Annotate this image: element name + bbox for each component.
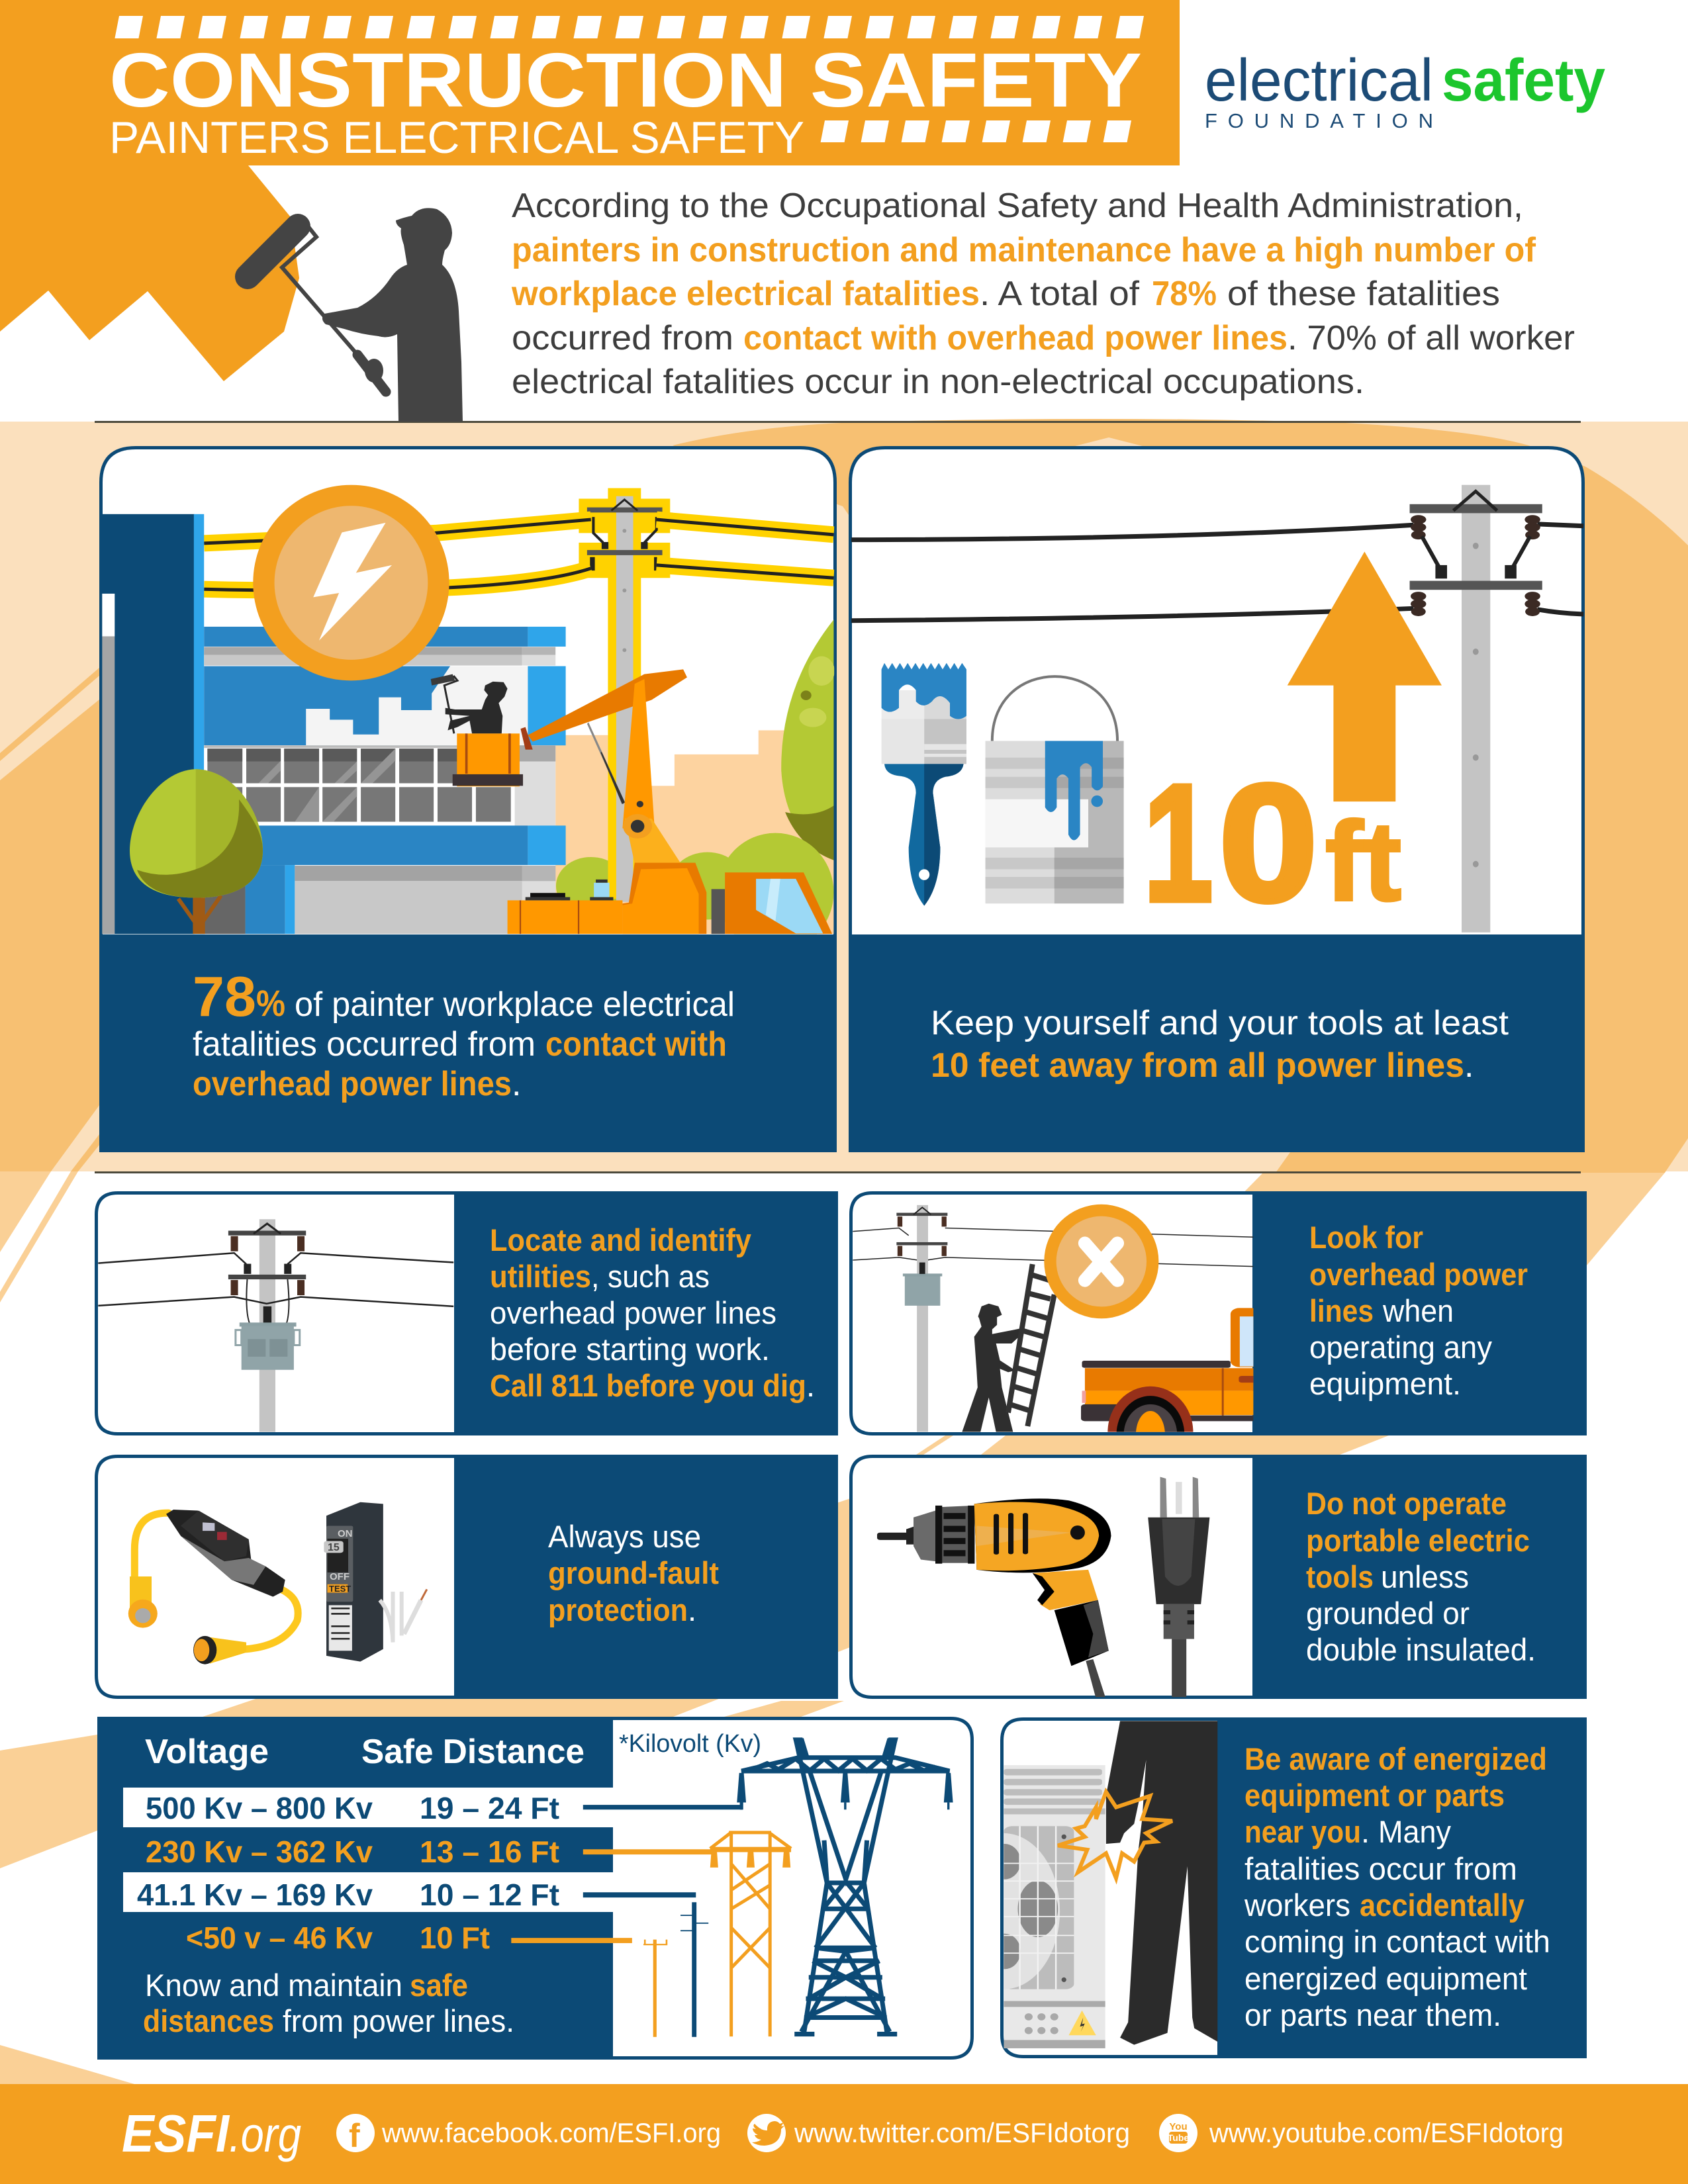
caption: overhead power lines bbox=[193, 1065, 512, 1103]
intro text: . 70% of all worker bbox=[1288, 319, 1575, 357]
illustration: building, crane and power lines bbox=[102, 485, 835, 952]
text: grounded or bbox=[1306, 1596, 1470, 1631]
website bbox=[122, 2104, 301, 2163]
table rows: 500 Kv – 800 Kv bbox=[146, 1791, 373, 1825]
intro text: painters in construction and maintenance have a high number of bbox=[512, 231, 1536, 269]
ladder bbox=[1008, 1264, 1055, 1426]
panel: locate utilities bbox=[95, 1191, 838, 1435]
caption: Know and maintain bbox=[145, 1968, 402, 2003]
breaker bbox=[326, 1502, 383, 1662]
intro text: . A total of bbox=[980, 275, 1140, 313]
caption: contact with bbox=[545, 1025, 727, 1064]
text: Always use bbox=[548, 1519, 701, 1554]
electric spark bbox=[1058, 1792, 1172, 1878]
subtitle: PAINTERS ELECTRICAL SAFETY bbox=[109, 113, 804, 163]
text: before starting work. bbox=[490, 1332, 770, 1367]
icon: facebook: f bbox=[349, 2117, 360, 2154]
truck bbox=[508, 900, 622, 934]
text: workers bbox=[1244, 1888, 1350, 1923]
icon: youtube bbox=[1159, 2114, 1197, 2152]
footer bbox=[0, 2084, 1688, 2184]
intro text: of these fatalities bbox=[1227, 275, 1500, 313]
website: .org bbox=[229, 2107, 301, 2162]
text: fatalities occur from bbox=[1244, 1851, 1517, 1886]
hazard stripes bottom bbox=[821, 120, 1131, 142]
illustration: electric plug bbox=[1160, 1477, 1167, 1518]
10 ft label: 0 bbox=[1219, 751, 1317, 935]
text: accidentally bbox=[1360, 1888, 1524, 1923]
dark tower bbox=[102, 514, 195, 934]
caption: 10 feet away from all power lines bbox=[931, 1046, 1464, 1085]
10 ft label bbox=[1144, 751, 1401, 935]
panel: safe distances table bbox=[97, 1717, 974, 2060]
table rows: 13 – 16 Ft bbox=[420, 1835, 559, 1869]
logo: electrical safety foundation bbox=[1205, 48, 1605, 132]
logo: electrical safety foundation: FOUNDATION bbox=[1205, 109, 1433, 132]
10 ft label: 1 bbox=[1144, 751, 1213, 935]
panel: energized equipment bbox=[948, 1717, 1587, 2058]
10 ft label: ft bbox=[1325, 799, 1401, 925]
small orange pole bbox=[653, 1940, 657, 2037]
intro text: According to the Occupational Safety and Health Administration, bbox=[512, 187, 1523, 225]
icon: painter silhouette with roller bbox=[248, 208, 463, 422]
caption: . bbox=[1464, 1046, 1474, 1085]
text: or parts near them. bbox=[1244, 1997, 1501, 2032]
caption: from power lines. bbox=[283, 2003, 514, 2038]
text: Be aware of energized bbox=[1244, 1741, 1547, 1776]
orange tower bbox=[710, 1833, 791, 2036]
text: equipment or parts bbox=[1244, 1778, 1505, 1813]
text: Many bbox=[1378, 1814, 1451, 1849]
caption: . bbox=[512, 1065, 521, 1103]
panel: 78 percent overhead lines bbox=[99, 446, 837, 1152]
truck bbox=[1231, 1308, 1260, 1367]
text: utilities bbox=[490, 1259, 591, 1294]
text: when bbox=[1382, 1293, 1454, 1328]
text: operating any bbox=[1309, 1330, 1492, 1365]
text bbox=[548, 1519, 719, 1627]
intro text: 78% bbox=[1152, 275, 1217, 313]
text: unless bbox=[1381, 1559, 1469, 1594]
text: Locate and identify bbox=[490, 1222, 751, 1257]
small painter on wall bbox=[445, 682, 508, 733]
table rows: 10 – 12 Ft bbox=[420, 1878, 559, 1912]
illustration: drill bbox=[877, 1477, 1209, 1697]
hazard stripes top bbox=[115, 16, 1144, 38]
icon: x badge bbox=[1044, 1205, 1158, 1318]
illustration: GFCI cord and breaker bbox=[128, 1502, 427, 1664]
lightning badge bbox=[253, 485, 449, 680]
website: ESFI bbox=[122, 2104, 230, 2163]
navy pole bbox=[692, 1902, 696, 2037]
table header: Safe Distance bbox=[361, 1733, 585, 1771]
caption: distances bbox=[143, 2003, 274, 2038]
caption: Keep yourself and your tools at least bbox=[931, 1004, 1509, 1042]
connector lines bbox=[583, 1805, 743, 1809]
title: CONSTRUCTION SAFETY bbox=[109, 37, 1142, 123]
text: Look for bbox=[1309, 1220, 1423, 1255]
breaker labels: OFF bbox=[330, 1571, 350, 1582]
table rows bbox=[137, 1791, 559, 1955]
text: portable electric bbox=[1306, 1523, 1530, 1558]
caption bbox=[193, 966, 735, 1103]
icon: facebook bbox=[336, 2114, 375, 2154]
panel: look for overhead lines bbox=[849, 1191, 1587, 1478]
caption bbox=[143, 1968, 514, 2038]
text: double insulated. bbox=[1306, 1632, 1536, 1667]
caption bbox=[931, 1004, 1509, 1085]
large lattice tower bbox=[741, 1739, 949, 2032]
intro text: contact with overhead power lines bbox=[743, 319, 1288, 357]
intro text bbox=[511, 187, 1575, 401]
caption: of painter workplace electrical bbox=[295, 985, 735, 1024]
worker silhouette bbox=[962, 1304, 1023, 1432]
intro text: electrical fatalities occur in non-electrical occupations. bbox=[512, 363, 1364, 401]
panel: portable electric tools bbox=[849, 1455, 1587, 1699]
arrow bbox=[1288, 552, 1442, 801]
intro text: occurred from bbox=[512, 319, 733, 357]
text: near you bbox=[1244, 1814, 1361, 1849]
illustration: pole, wires, brush, can, arrow bbox=[851, 485, 1583, 933]
text: equipment. bbox=[1309, 1366, 1461, 1401]
icon: youtube: Tube bbox=[1168, 2132, 1189, 2143]
text bbox=[1244, 1741, 1550, 2032]
text: . bbox=[1361, 1814, 1370, 1849]
caption: safe bbox=[410, 1968, 468, 2003]
text: overhead power lines bbox=[490, 1295, 776, 1330]
text bbox=[490, 1222, 815, 1403]
panel: keep 10 feet away bbox=[849, 446, 1585, 1152]
text: . bbox=[688, 1592, 696, 1627]
paint can bbox=[992, 676, 1117, 741]
breaker labels bbox=[328, 1528, 352, 1594]
note: *Kilovolt (Kv) bbox=[619, 1730, 761, 1758]
icon: twitter bbox=[747, 2114, 786, 2152]
text: lines bbox=[1309, 1293, 1374, 1328]
text: ground-fault bbox=[548, 1555, 719, 1590]
right tree bbox=[781, 619, 833, 860]
breaker labels: TEST bbox=[329, 1584, 351, 1594]
table rows: 10 Ft bbox=[420, 1921, 490, 1955]
worker legs bbox=[1106, 1721, 1217, 2045]
illustration: transmission towers and connectors bbox=[511, 1737, 953, 2037]
yellow power lines bbox=[204, 520, 833, 590]
icon: youtube: You bbox=[1169, 2121, 1188, 2132]
intro text: workplace electrical fatalities bbox=[511, 275, 980, 313]
building bbox=[204, 627, 528, 647]
illustration: worker, ladder, truck bbox=[853, 1205, 1260, 1478]
table header: Voltage bbox=[145, 1733, 269, 1771]
background shapes bbox=[0, 419, 1688, 2084]
text: coming in contact with bbox=[1244, 1924, 1550, 1959]
table rows: 230 Kv – 362 Kv bbox=[146, 1835, 373, 1869]
youtube url: www.youtube.com/ESFIdotorg bbox=[1209, 2117, 1564, 2148]
caption: fatalities occurred from bbox=[193, 1025, 536, 1064]
left tree bbox=[193, 895, 205, 934]
caption: % bbox=[256, 982, 285, 1024]
logo: electrical safety foundation: electrical bbox=[1205, 48, 1433, 114]
text bbox=[1306, 1486, 1536, 1667]
illustration: utility pole with transformer bbox=[98, 1219, 453, 1432]
text bbox=[1309, 1220, 1528, 1401]
logo: electrical safety foundation: safety bbox=[1442, 48, 1605, 114]
panel: ground-fault protection bbox=[95, 1455, 838, 1699]
facebook url: www.facebook.com/ESFI.org bbox=[381, 2117, 721, 2148]
table rows: <50 v – 46 Kv bbox=[186, 1921, 373, 1955]
text: . bbox=[806, 1368, 815, 1403]
text: energized equipment bbox=[1244, 1961, 1527, 1996]
table header bbox=[145, 1733, 585, 1771]
breaker labels: 15 bbox=[328, 1542, 340, 1553]
illustration: air conditioner unit and worker bbox=[948, 1721, 1217, 2048]
twitter url: www.twitter.com/ESFIdotorg bbox=[794, 2117, 1130, 2148]
text: Call 811 before you dig bbox=[490, 1368, 806, 1403]
pole with highlight bbox=[608, 488, 641, 899]
text: overhead power bbox=[1309, 1257, 1528, 1292]
breaker labels: ON bbox=[338, 1528, 352, 1539]
header banner bbox=[0, 0, 1180, 381]
pole bbox=[1462, 485, 1490, 933]
bushes bbox=[556, 857, 616, 900]
text: protection bbox=[548, 1592, 688, 1627]
table rows: 19 – 24 Ft bbox=[420, 1791, 559, 1825]
text: tools bbox=[1306, 1559, 1374, 1594]
text: , such as bbox=[591, 1259, 710, 1294]
text: Do not operate bbox=[1306, 1486, 1507, 1521]
boom and bucket bbox=[587, 722, 625, 804]
brush bbox=[882, 690, 924, 721]
caption: 78 bbox=[193, 966, 256, 1028]
table rows: 41.1 Kv – 169 Kv bbox=[137, 1878, 373, 1912]
